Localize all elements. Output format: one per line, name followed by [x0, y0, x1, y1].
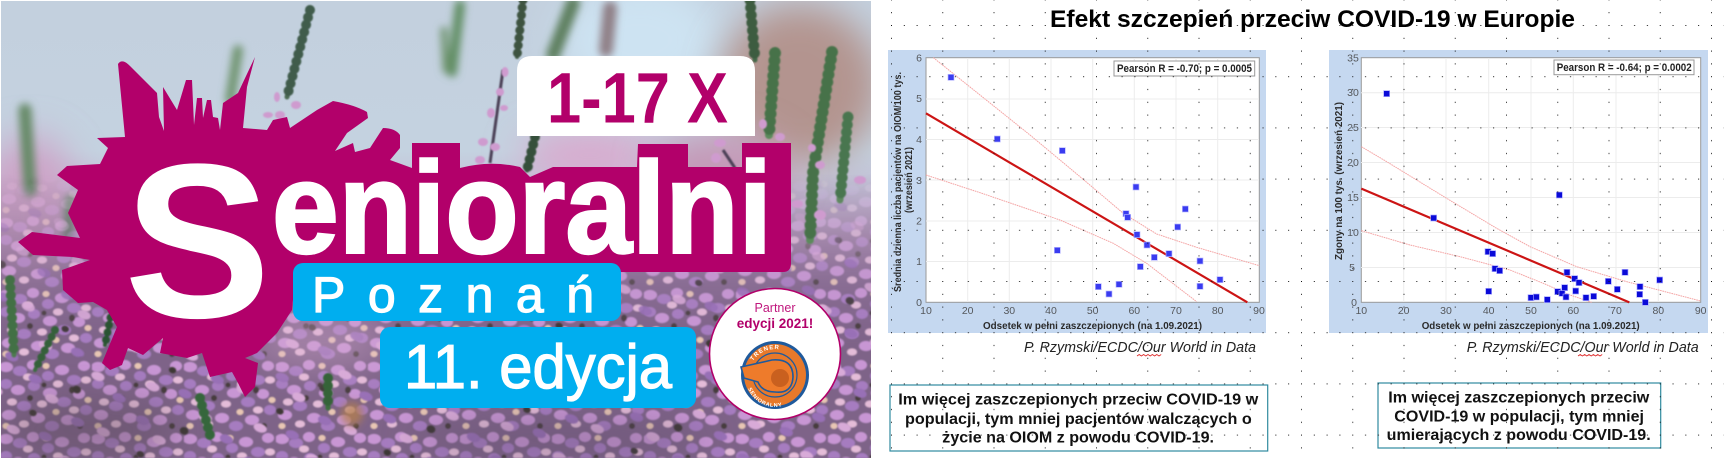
correlation label: Pearson R = -0.70; p = 0.0005 — [1117, 63, 1252, 75]
axis ticks: 10 — [1347, 227, 1359, 239]
axis ticks: 80 — [1212, 305, 1224, 317]
logo wordmark: Senioralni: S — [124, 118, 271, 364]
axis ticks: 25 — [1347, 122, 1359, 134]
callout: ICU conclusion — [890, 385, 1268, 451]
callout: ICU conclusion: Im więcej zaszczepionych przeciw COVID-19 w — [898, 392, 1259, 409]
city label: Poznań: Poznań — [312, 267, 594, 323]
axis ticks: 2 — [916, 216, 922, 228]
chart: deaths vs vaccination — [1329, 50, 1708, 333]
callout: deaths conclusion: COVID-19 w populacji, tym mniej — [1394, 408, 1644, 425]
chart: ICU patients vs vaccination — [888, 50, 1266, 333]
axis ticks: 30 — [1003, 305, 1015, 317]
axis ticks: 20 — [1398, 305, 1410, 317]
axis ticks — [1347, 52, 1707, 317]
axis ticks: 20 — [962, 305, 974, 317]
axis ticks: 4 — [916, 134, 922, 146]
x axis label: Odsetek w pełni zaszczepionych (na 1.09.2021) — [983, 320, 1202, 332]
axis ticks: 60 — [1128, 305, 1140, 317]
axis ticks: 80 — [1652, 305, 1664, 317]
axis ticks: 1 — [916, 256, 922, 268]
photo background — [0, 0, 880, 458]
axis ticks: 70 — [1170, 305, 1182, 317]
source note: left chart: P. Rzymski/ECDC/Our World in Data — [1024, 339, 1256, 356]
axis ticks: 30 — [1440, 305, 1452, 317]
y axis label: Zgony na 100 tys. (wrzesień 2021) — [1333, 102, 1345, 260]
logo wordmark: Senioralni — [124, 118, 772, 364]
axis ticks: 50 — [1525, 305, 1537, 317]
partner badge: Partner — [754, 301, 796, 315]
correlation label: Pearson R = -0.64; p = 0.0002 — [1557, 62, 1692, 74]
axis ticks: 0 — [916, 297, 922, 309]
axis ticks: 10 — [920, 305, 932, 317]
date badge: 1-17 X: 1-17 X — [547, 60, 728, 139]
axis ticks: 5 — [916, 93, 922, 105]
edition label: 11. edycja: 11. edycja — [404, 333, 672, 402]
axis ticks: 30 — [1347, 87, 1359, 99]
axis ticks: 40 — [1045, 305, 1057, 317]
callout: deaths conclusion: umierających z powodu COVID-19. — [1387, 427, 1651, 444]
axis ticks: 20 — [1347, 157, 1359, 169]
callout: deaths conclusion: Im więcej zaszczepionych przeciw — [1388, 389, 1650, 406]
axis ticks: 60 — [1567, 305, 1579, 317]
axis ticks: 90 — [1253, 305, 1265, 317]
axis ticks: 40 — [1483, 305, 1495, 317]
axis ticks: 3 — [916, 175, 922, 187]
axis ticks: 6 — [916, 52, 922, 64]
axis ticks: 50 — [1087, 305, 1099, 317]
callout: deaths conclusion — [1378, 383, 1661, 448]
axis ticks: 90 — [1695, 305, 1707, 317]
axis ticks: 5 — [1349, 262, 1355, 274]
icon: whistle emblem: TRENER — [750, 344, 779, 360]
logo wordmark: Senioralni: enioralni — [272, 135, 772, 281]
panel: heather photo banner — [1, 1, 871, 458]
y axis label — [891, 72, 915, 292]
icon: whistle emblem: SENIORALNY — [748, 388, 782, 407]
axis ticks — [916, 52, 1265, 317]
x axis label: Odsetek w pełni zaszczepionych (na 1.09.2021) — [1422, 320, 1640, 332]
partner badge: edycji 2021! — [737, 316, 813, 331]
regression lines and points — [926, 58, 1259, 302]
callout: ICU conclusion: życie na OIOM z powodu COVID-19. — [942, 430, 1214, 447]
magenta paint splat logo — [18, 57, 791, 397]
axis ticks: 10 — [1355, 305, 1367, 317]
axis ticks: 15 — [1347, 192, 1359, 204]
y axis label: Średnia dzienna liczba pacjentów na OIOM/100 tys. — [891, 72, 904, 292]
axis ticks: 0 — [1351, 297, 1357, 309]
title: Efekt szczepień przeciw COVID-19 w Europie — [1050, 6, 1575, 33]
axis ticks: 70 — [1610, 305, 1622, 317]
regression lines and points — [1361, 91, 1701, 305]
y axis label: (wrzesień 2021) — [903, 147, 915, 213]
callout: ICU conclusion: populacji, tym mniej pacjentów walczących o — [905, 411, 1252, 428]
partner badge — [708, 288, 842, 420]
source note: right chart: P. Rzymski/ECDC/Our World in Data — [1467, 339, 1699, 356]
axis ticks: 35 — [1347, 52, 1359, 64]
icon: whistle emblem — [740, 341, 809, 409]
